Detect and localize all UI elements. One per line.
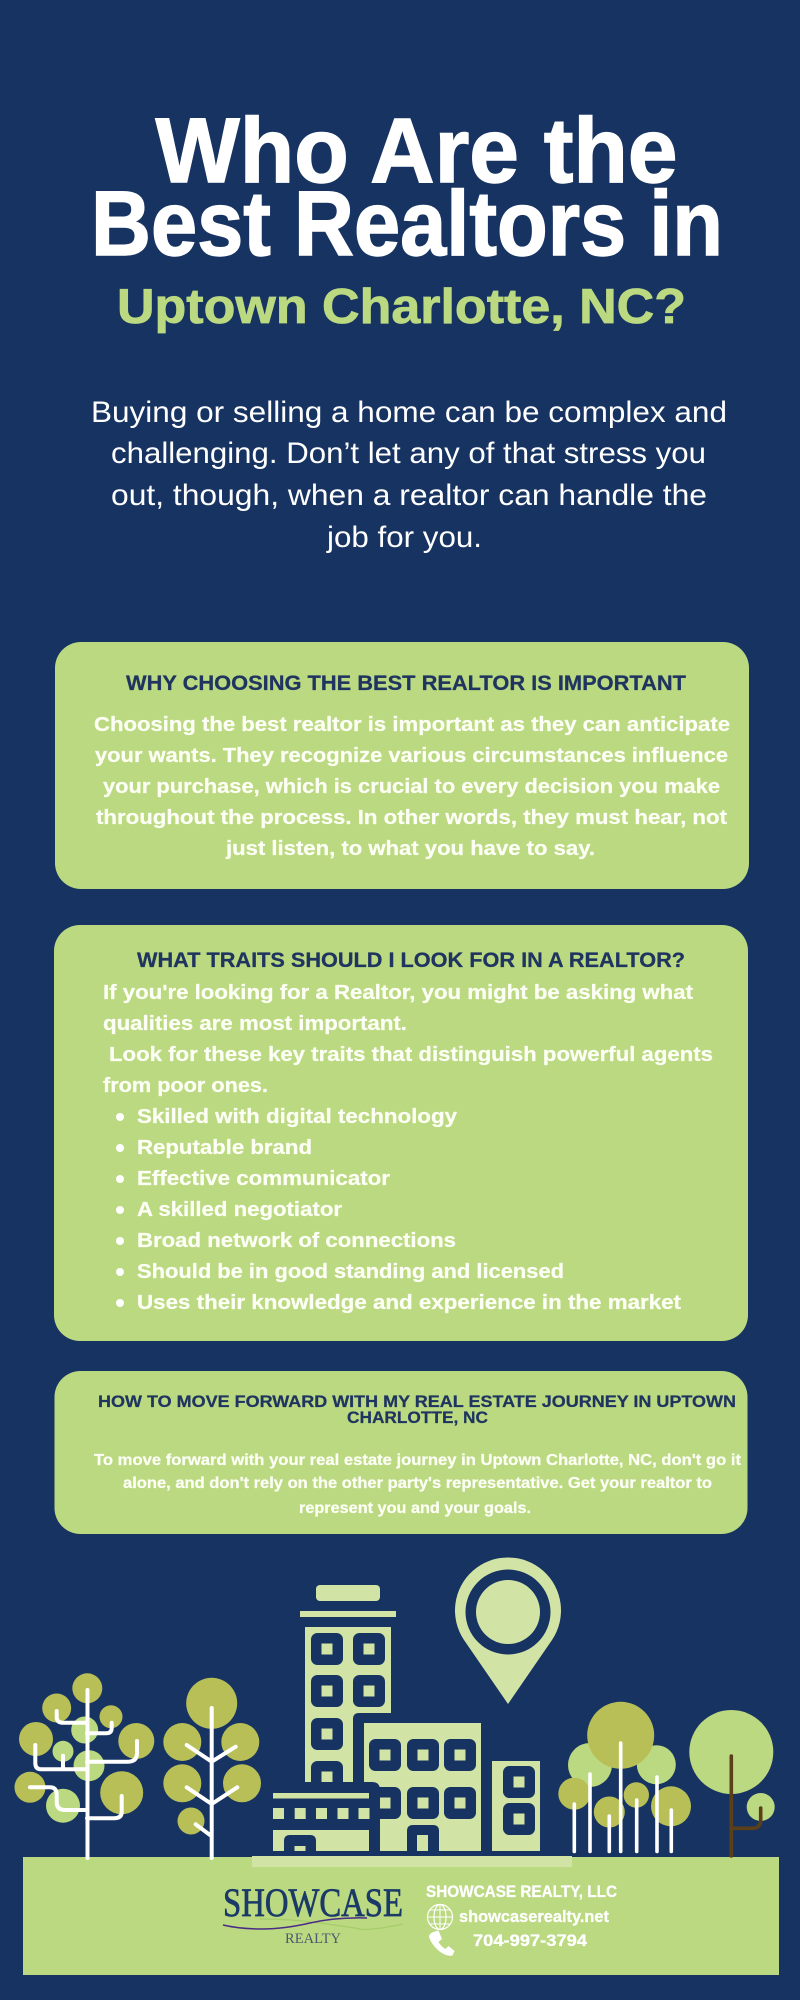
- intro paragraph: Buying or selling a home can be complex and: [91, 396, 727, 429]
- panel body text: [94, 1452, 741, 1517]
- panel body text: [94, 713, 730, 860]
- traits bullet list: A skilled negotiator: [137, 1198, 342, 1221]
- panel body text: throughout the process. In other words, they must hear, not: [96, 806, 727, 829]
- panel heading: WHY CHOOSING THE BEST REALTOR IS IMPORTANT: [126, 671, 686, 695]
- panel body text: your purchase, which is crucial to every decision you make: [103, 775, 720, 798]
- panel heading: CHARLOTTE, NC: [347, 1408, 488, 1427]
- icon: city buildings: [262, 1585, 540, 1856]
- subtitle: Uptown Charlotte, NC?: [117, 280, 686, 334]
- panel: what traits should I look for: [54, 925, 748, 1341]
- phone number: 704-997-3794: [473, 1931, 588, 1950]
- title: Best Realtors in: [91, 173, 723, 275]
- intro paragraph: job for you.: [326, 521, 482, 554]
- icon: tree cluster: [558, 1702, 691, 1852]
- panel heading: HOW TO MOVE FORWARD WITH MY REAL ESTATE JOURNEY IN UPTOWN: [98, 1392, 736, 1411]
- logo: Showcase Realty: [223, 1880, 403, 1947]
- intro paragraph: challenging. Don’t let any of that stress you: [111, 437, 706, 470]
- company name: SHOWCASE REALTY, LLC: [426, 1882, 617, 1901]
- icon: location pin: [455, 1557, 561, 1704]
- panel intro text: from poor ones.: [103, 1074, 268, 1097]
- panel heading: [98, 1392, 736, 1427]
- panel intro text: Look for these key traits that distinguish powerful agents: [109, 1043, 713, 1066]
- website: showcaserealty.net: [459, 1907, 609, 1926]
- panel body text: represent you and your goals.: [299, 1500, 531, 1517]
- panel body text: alone, and don't rely on the other party's representative. Get your realtor to: [123, 1475, 712, 1492]
- panel: how to move forward: [54, 1371, 748, 1534]
- traits bullet list: Effective communicator: [137, 1167, 390, 1190]
- intro paragraph: [91, 396, 727, 554]
- icon: tree with angled branches: [163, 1678, 261, 1858]
- icon: phone: [429, 1930, 454, 1956]
- traits bullet list: Reputable brand: [137, 1136, 312, 1159]
- tall tower: [300, 1585, 396, 1793]
- low building: [262, 1782, 380, 1856]
- title: Who Are the: [156, 100, 678, 202]
- traits bullet list: Broad network of connections: [137, 1229, 456, 1252]
- panel body text: To move forward with your real estate journey in Uptown Charlotte, NC, don't go it: [94, 1452, 741, 1469]
- sidewalk: [252, 1856, 572, 1867]
- panel intro text: [103, 981, 713, 1097]
- traits bullet list: Should be in good standing and licensed: [137, 1260, 564, 1283]
- panel body text: your wants. They recognize various circumstances influence: [95, 744, 728, 767]
- title: [91, 100, 723, 275]
- icon: globe: [428, 1904, 452, 1930]
- logo: Showcase Realty: SHOWCASE: [223, 1880, 403, 1925]
- intro paragraph: out, though, when a realtor can handle the: [111, 479, 707, 512]
- panel intro text: qualities are most important.: [103, 1012, 407, 1035]
- panel body text: Choosing the best realtor is important as they can anticipate: [94, 713, 730, 736]
- traits bullet list: Skilled with digital technology: [137, 1105, 458, 1128]
- middle building: [364, 1723, 481, 1851]
- panel intro text: If you're looking for a Realtor, you might be asking what: [103, 981, 693, 1004]
- panel heading: WHAT TRAITS SHOULD I LOOK FOR IN A REALTOR?: [137, 949, 685, 972]
- logo: Showcase Realty: REALTY: [285, 1931, 342, 1947]
- panel body text: just listen, to what you have to say.: [225, 837, 595, 860]
- small right building: [492, 1761, 540, 1851]
- panel: why choosing the best realtor is important: [55, 642, 749, 889]
- icon: round tree with brown trunk: [689, 1710, 775, 1856]
- traits bullet list: [116, 1105, 681, 1314]
- icon: tree with curved branches: [14, 1673, 154, 1858]
- traits bullet list: Uses their knowledge and experience in the market: [137, 1291, 681, 1314]
- ground band: [23, 1857, 779, 1975]
